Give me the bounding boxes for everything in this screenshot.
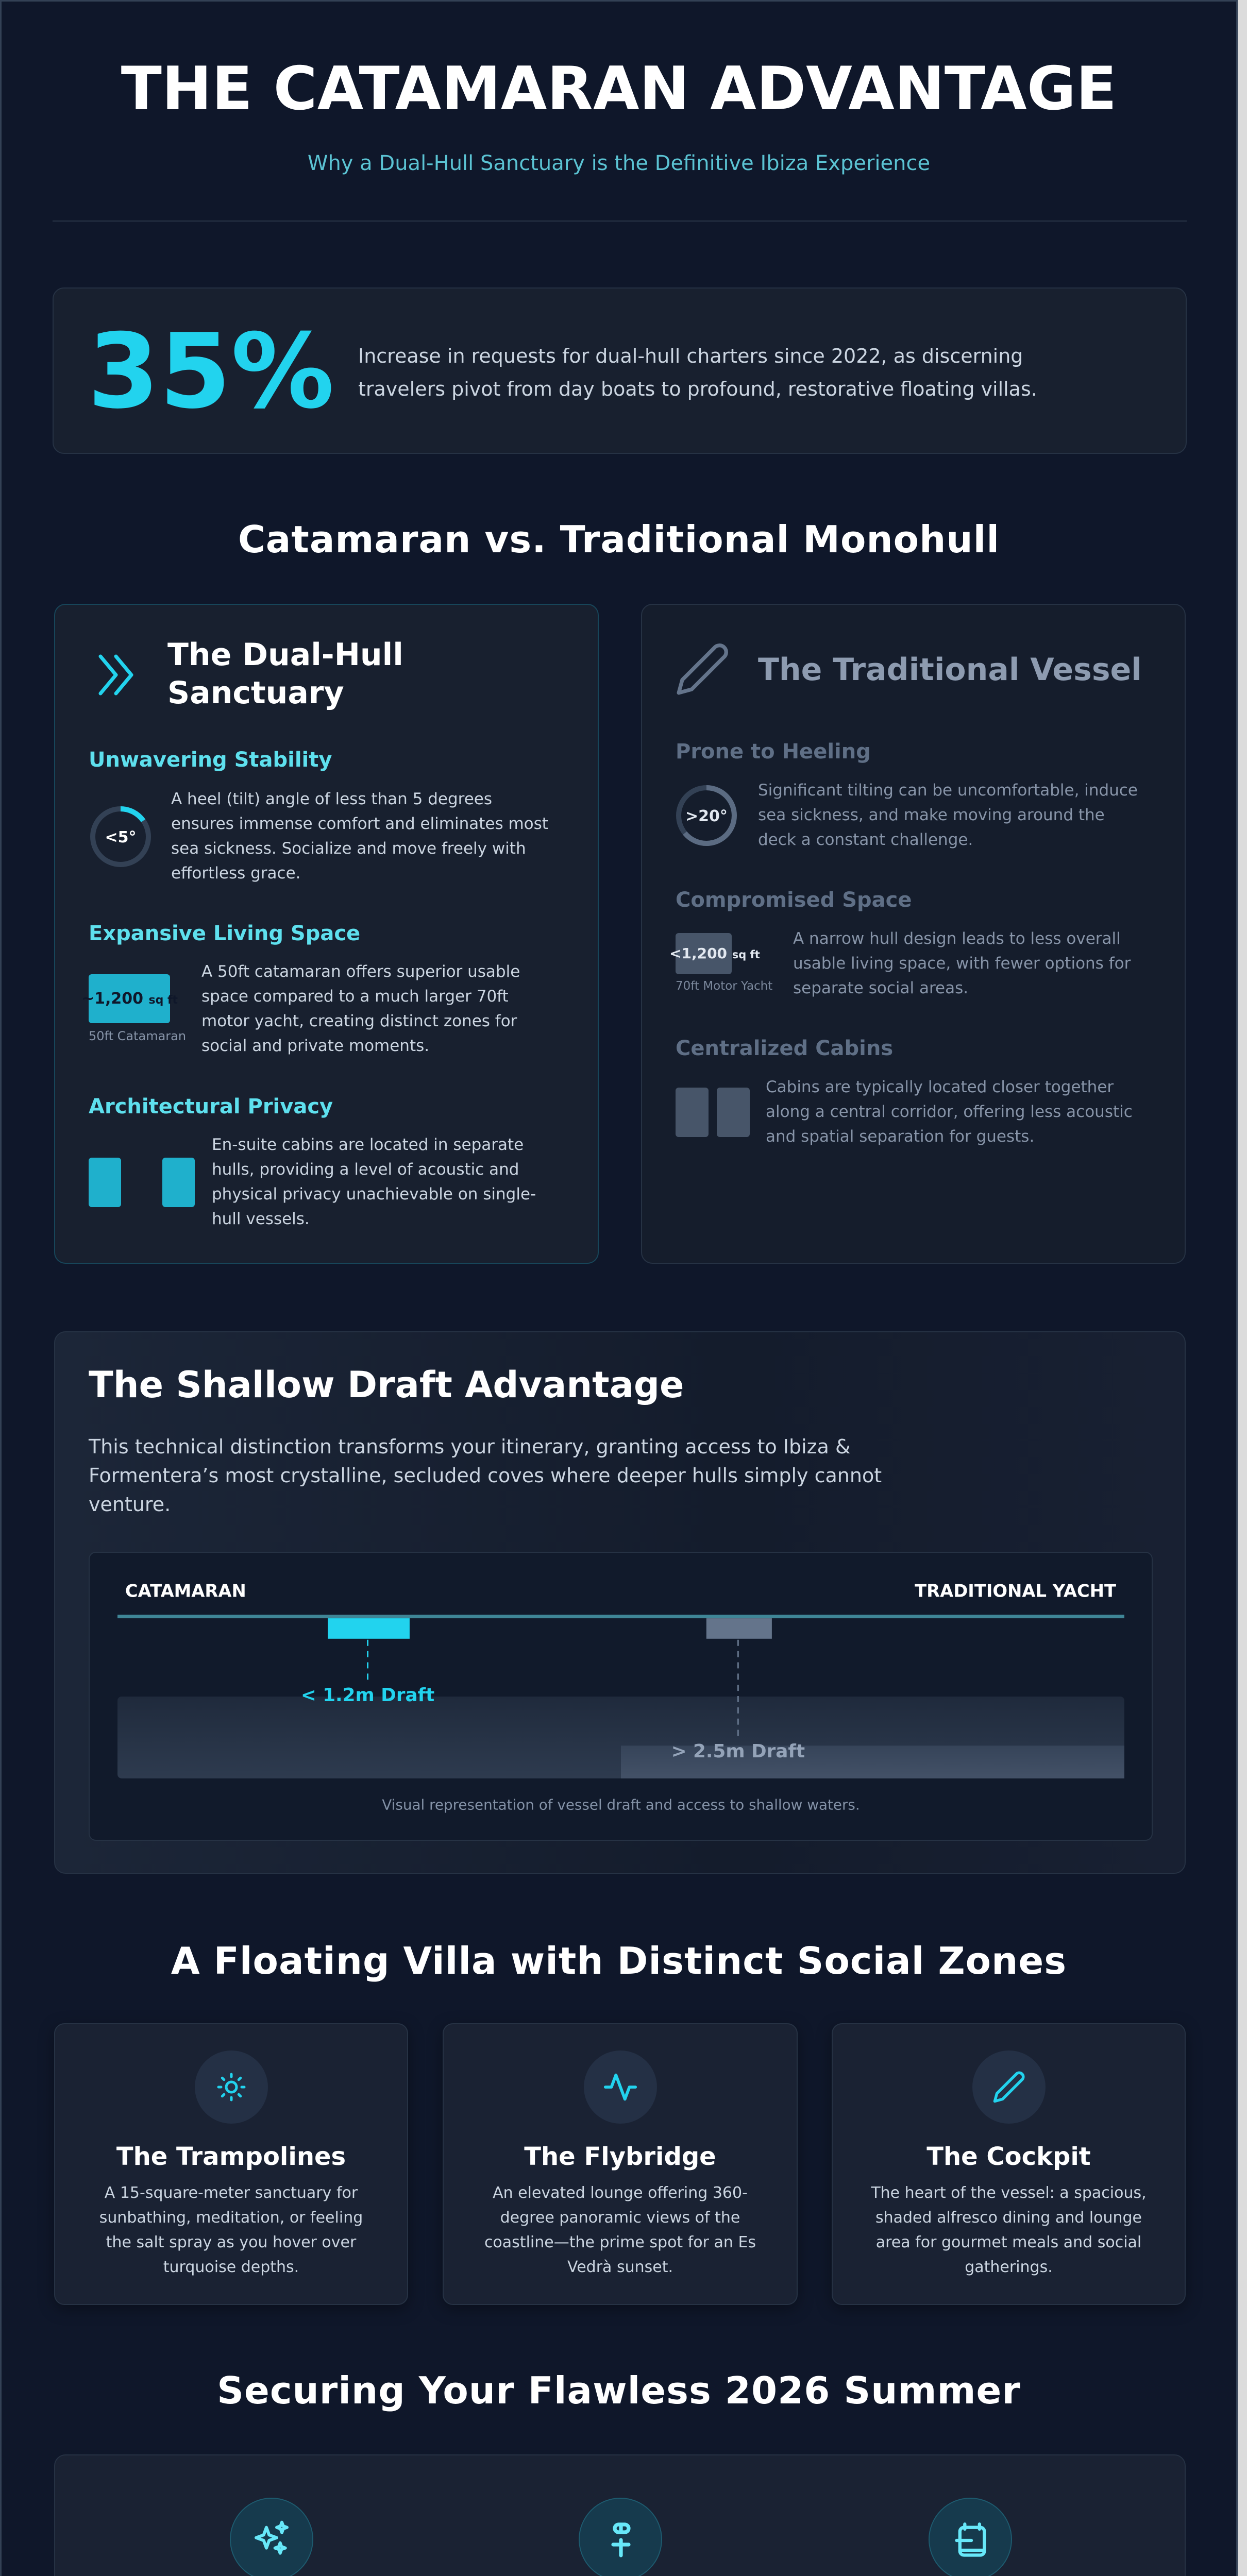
subheading: heeling: Prone to Heeling xyxy=(676,740,871,764)
text: heeling: sea sickness, and make moving around the xyxy=(758,806,1105,824)
text: space: A narrow hull design leads to less overall xyxy=(793,929,1121,948)
label: catamaran: CATAMARAN xyxy=(125,1581,246,1601)
text: shaded alfresco dining and lounge xyxy=(875,2209,1142,2227)
icon: logistics xyxy=(579,2498,662,2576)
icon: pencil xyxy=(972,2050,1045,2124)
text xyxy=(484,2184,756,2276)
panel: dual-hull sanctuary xyxy=(54,604,599,1264)
subheading: stability: Unwavering Stability xyxy=(89,748,332,772)
text: coastline—the prime spot for an Es xyxy=(484,2233,756,2251)
text: space xyxy=(793,929,1131,997)
text: The heart of the vessel: a spacious, xyxy=(871,2184,1147,2202)
stat description: Increase in requests for dual-hull charters since 2022, as discerning xyxy=(358,345,1023,367)
paragraph: Formentera’s most crystalline, secluded coves where deeper hulls simply cannot xyxy=(89,1464,882,1487)
stat number: 35% xyxy=(88,312,334,432)
chart: draft diagram xyxy=(89,1552,1153,1841)
icon: central cabins xyxy=(676,1088,750,1137)
stat description: travelers pivot from day boats to profound, restorative floating villas. xyxy=(358,378,1037,400)
text: turquoise depths. xyxy=(163,2258,299,2276)
box: 1,200 sq ft catamaran: 50ft Catamaran xyxy=(89,1029,186,1043)
panel title: The Dual-Hull xyxy=(167,637,403,673)
text xyxy=(871,2184,1147,2276)
text: area for gourmet meals and social xyxy=(876,2233,1141,2251)
gauge: <5° xyxy=(90,806,151,867)
text: living space: space compared to a much larger 70ft xyxy=(201,987,509,1006)
title: The Trampolines xyxy=(116,2142,346,2171)
box: 1,200 sq ft catamaran: ~1,200 sq ft xyxy=(81,990,178,1008)
icon: pencil xyxy=(677,643,728,694)
icon: sun xyxy=(195,2050,268,2124)
text: A 15-square-meter sanctuary for xyxy=(105,2184,358,2202)
icon: calendar xyxy=(929,2498,1012,2576)
text: cabins: Cabins are typically located closer together xyxy=(766,1078,1114,1096)
box: <1,200 sq ft yacht: <1,200 sq ft xyxy=(669,945,760,962)
panel: trampolines xyxy=(54,2023,408,2305)
subheading: cabins: Centralized Cabins xyxy=(676,1037,893,1060)
text: degree panoramic views of the xyxy=(500,2209,740,2227)
stat description xyxy=(358,345,1037,400)
icon: sparkles xyxy=(230,2498,313,2576)
text: An elevated lounge offering 360- xyxy=(493,2184,748,2202)
title: THE CATAMARAN ADVANTAGE xyxy=(121,54,1117,124)
catamaran hull: < 1.2m Draft xyxy=(301,1685,434,1706)
panel: shallow draft xyxy=(54,1331,1186,1874)
text: stability: ensures immense comfort and eliminates most xyxy=(171,815,548,833)
text: privacy: En-suite cabins are located in separate xyxy=(212,1136,524,1154)
text: gatherings. xyxy=(965,2258,1053,2276)
text: privacy xyxy=(212,1136,536,1228)
gauge: >20° xyxy=(676,785,737,846)
title: The Cockpit xyxy=(926,2142,1091,2171)
seabed xyxy=(117,1697,1124,1778)
text: heeling: Significant tilting can be uncomfortable, induce xyxy=(758,781,1138,800)
heading: securing summer: Securing Your Flawless 2026 Summer xyxy=(217,2369,1021,2412)
box: <1,200 sq ft yacht xyxy=(669,933,772,993)
text: heeling: deck a constant challenge. xyxy=(758,831,973,849)
icon: chevrons xyxy=(99,654,133,696)
paragraph xyxy=(89,1435,882,1516)
text: space: separate social areas. xyxy=(793,979,968,997)
text: stability xyxy=(171,790,548,883)
text: cabins: and spatial separation for guests. xyxy=(766,1127,1034,1146)
panel title: The Traditional Vessel xyxy=(758,652,1142,688)
yacht hull: > 2.5m Draft xyxy=(671,1741,805,1762)
gauge: >20°: >20° xyxy=(685,807,728,825)
text: living space xyxy=(201,962,520,1055)
text: Vedrà sunset. xyxy=(567,2258,673,2276)
text: sunbathing, meditation, or feeling xyxy=(99,2209,363,2227)
text: living space: social and private moments. xyxy=(201,1037,429,1055)
subheading: space: Compromised Space xyxy=(676,888,912,912)
heading: The Shallow Draft Advantage xyxy=(89,1364,684,1406)
text: the salt spray as you hover over xyxy=(106,2233,356,2251)
stat callout: 35% xyxy=(53,287,1187,454)
heading: social zones: A Floating Villa with Distinct Social Zones xyxy=(171,1939,1067,1982)
panel title xyxy=(167,637,403,711)
text: stability: effortless grace. xyxy=(171,864,301,883)
subtitle: Why a Dual-Hull Sanctuary is the Definitive Ibiza Experience xyxy=(308,151,930,175)
icon: separate cabins xyxy=(89,1158,195,1207)
text: privacy: hulls, providing a level of acoustic and xyxy=(212,1160,519,1179)
title: The Flybridge xyxy=(524,2142,716,2171)
panel: securing steps xyxy=(54,2454,1186,2576)
text: stability: sea sickness. Socialize and move freely with xyxy=(171,839,526,858)
paragraph: venture. xyxy=(89,1493,171,1516)
panel: cockpit xyxy=(832,2023,1186,2305)
text: heeling xyxy=(758,781,1138,849)
text: privacy: physical privacy unachievable on single- xyxy=(212,1185,536,1204)
subheading: living space: Expansive Living Space xyxy=(89,922,360,945)
catamaran hull xyxy=(301,1618,434,1706)
step: bespoke curation xyxy=(230,2498,313,2576)
caption: Visual representation of vessel draft and access to shallow waters. xyxy=(382,1796,860,1813)
text: living space: motor yacht, creating distinct zones for xyxy=(201,1012,517,1030)
gauge: <5°: <5° xyxy=(105,828,137,846)
text: stability: A heel (tilt) angle of less than 5 degrees xyxy=(171,790,492,808)
subheading: privacy: Architectural Privacy xyxy=(89,1095,333,1118)
panel: flybridge xyxy=(443,2023,798,2305)
water line xyxy=(117,1615,1124,1618)
icon: pulse xyxy=(583,2050,656,2124)
text xyxy=(99,2184,363,2276)
panel: traditional vessel xyxy=(641,604,1186,1264)
heading: comparison: Catamaran vs. Traditional Monohull xyxy=(238,518,1000,561)
text: space: usable living space, with fewer options for xyxy=(793,954,1131,973)
text: living space: A 50ft catamaran offers superior usable xyxy=(201,962,520,981)
label: traditional yacht: TRADITIONAL YACHT xyxy=(915,1581,1116,1601)
text: cabins: along a central corridor, offering less acoustic xyxy=(766,1103,1133,1121)
text: cabins xyxy=(766,1078,1133,1146)
yacht hull xyxy=(671,1618,805,1762)
step: logistics xyxy=(579,2498,662,2576)
panel title: Sanctuary xyxy=(167,675,344,711)
box: 1,200 sq ft catamaran xyxy=(81,974,186,1043)
paragraph: This technical distinction transforms your itinerary, granting access to Ibiza & xyxy=(89,1435,851,1458)
box: <1,200 sq ft yacht: 70ft Motor Yacht xyxy=(676,979,772,993)
text: privacy: hull vessels. xyxy=(212,1210,310,1228)
step: early selection xyxy=(929,2498,1012,2576)
